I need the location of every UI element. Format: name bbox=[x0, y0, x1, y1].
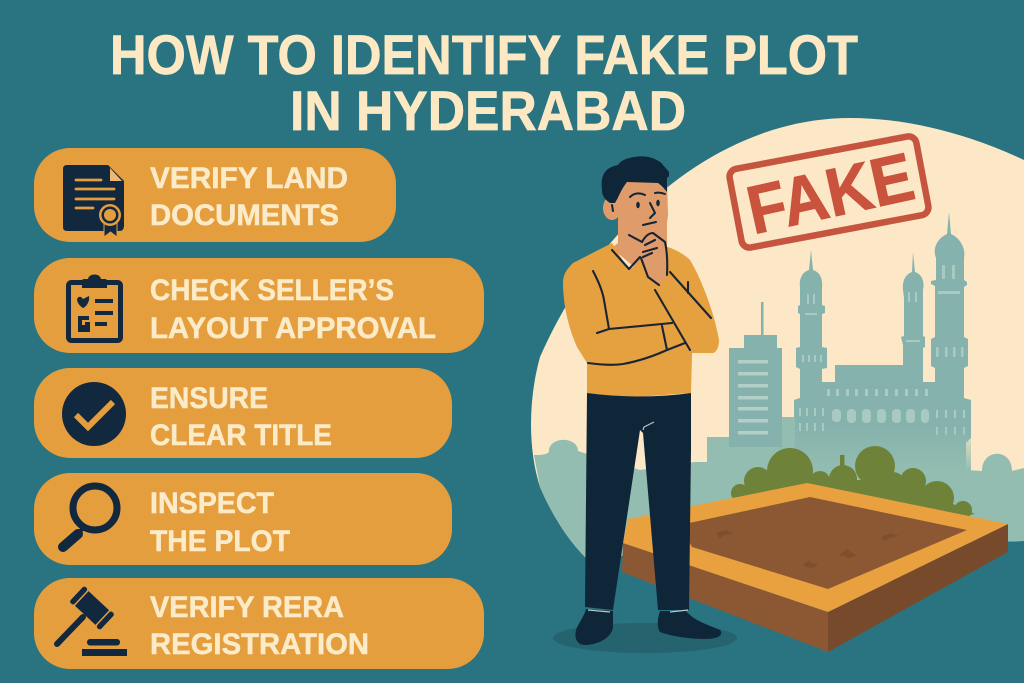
icon: certified document bbox=[63, 165, 124, 237]
hand on chin bbox=[630, 233, 668, 285]
title: IN HYDERABAD bbox=[290, 79, 686, 142]
panel: inspect the plot bbox=[34, 473, 452, 565]
hair bbox=[602, 156, 669, 203]
ground shadow bbox=[553, 623, 737, 653]
label bbox=[150, 162, 348, 232]
label: THE PLOT bbox=[150, 525, 290, 558]
title bbox=[110, 23, 858, 142]
label bbox=[150, 487, 290, 558]
plot soil bbox=[680, 497, 967, 589]
icon: gavel bbox=[57, 586, 127, 656]
person thinking bbox=[553, 156, 737, 653]
sweater bbox=[563, 243, 719, 398]
icon: check mark circle bbox=[62, 382, 126, 446]
facial features bbox=[612, 193, 665, 225]
icon: clipboard checklist bbox=[68, 274, 120, 340]
shoes bbox=[575, 609, 721, 645]
icon: magnifying glass bbox=[63, 486, 117, 547]
panel: verify RERA registration bbox=[34, 578, 484, 669]
sweater and hand outlines bbox=[588, 233, 711, 365]
title: HOW TO IDENTIFY FAKE PLOT bbox=[110, 23, 858, 86]
label: VERIFY LAND bbox=[150, 162, 348, 195]
skyline: Charminar monument bbox=[794, 212, 971, 471]
label: CLEAR TITLE bbox=[150, 419, 332, 452]
face bbox=[618, 178, 668, 240]
label bbox=[150, 382, 332, 452]
skyline: misty foreground bbox=[534, 417, 1024, 557]
label: VERIFY RERA bbox=[150, 591, 344, 624]
label bbox=[150, 274, 436, 345]
label: LAYOUT APPROVAL bbox=[150, 312, 436, 345]
label: REGISTRATION bbox=[150, 628, 369, 661]
ear bbox=[603, 196, 621, 220]
label: DOCUMENTS bbox=[150, 199, 339, 232]
footprints bbox=[716, 530, 899, 568]
plot border bbox=[623, 483, 1008, 612]
label: CHECK SELLER’S bbox=[150, 274, 394, 307]
trousers bbox=[585, 393, 691, 610]
panel: check seller's layout approval bbox=[34, 258, 484, 353]
plot side walls bbox=[622, 543, 828, 652]
illustration: city backdrop disc bbox=[531, 118, 1024, 557]
label: ENSURE bbox=[150, 382, 268, 415]
illustration: plot of land bbox=[622, 483, 1008, 652]
skyline: left tower bbox=[729, 302, 782, 448]
panel: ensure clear title bbox=[34, 368, 452, 458]
label bbox=[150, 591, 369, 661]
bushes bbox=[731, 446, 975, 530]
panel: verify land documents bbox=[34, 148, 396, 242]
label: INSPECT bbox=[150, 487, 274, 520]
neck bbox=[612, 215, 667, 272]
stamp: FAKE: FAKE bbox=[740, 138, 921, 249]
